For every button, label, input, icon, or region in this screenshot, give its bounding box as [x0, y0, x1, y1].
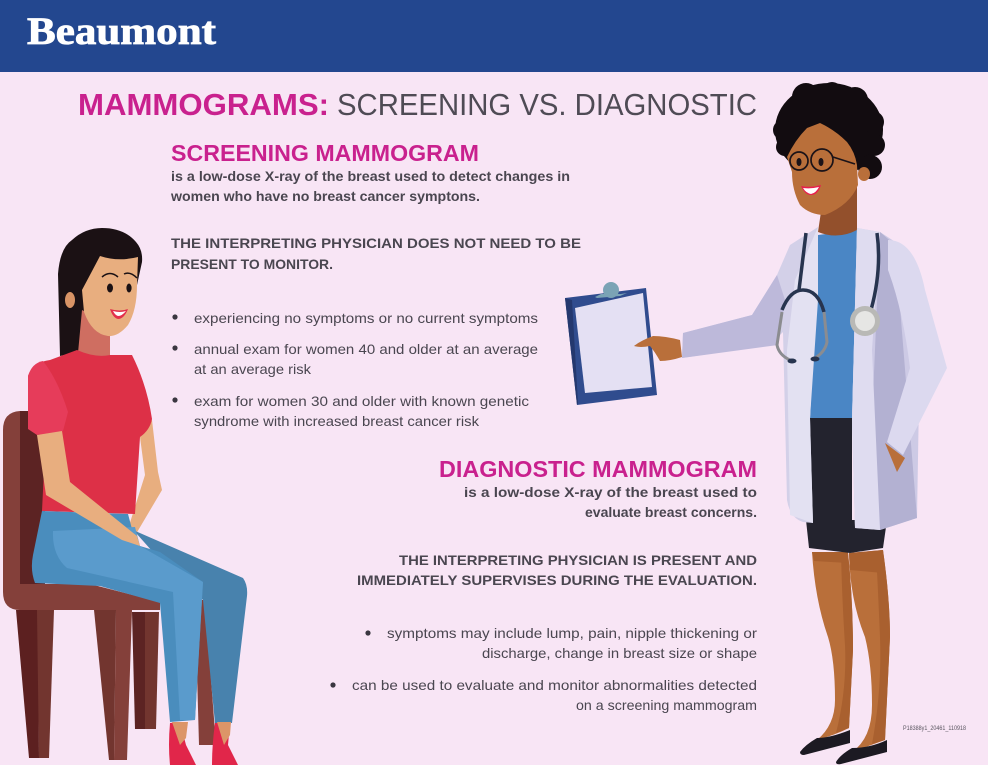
screening bullet list: at an average risk [194, 361, 312, 377]
screening bullet list: exam for women 30 and older with known genetic [194, 393, 529, 409]
hair [773, 82, 885, 179]
screening definition [170, 168, 570, 204]
coat [682, 227, 920, 530]
diagnostic supervision statement: IMMEDIATELY SUPERVISES DURING THE EVALUATION. [357, 572, 757, 588]
screening definition: is a low-dose X-ray of the breast used to detect changes in [171, 168, 570, 184]
screening bullet list: annual exam for women 40 and older at an average [194, 341, 538, 357]
chair [3, 411, 216, 760]
jeans back leg [120, 515, 247, 723]
screening bullet list: syndrome with increased breast cancer risk [194, 413, 480, 429]
diagnostic bullet list: symptoms may include lump, pain, nipple thickening or [387, 625, 757, 641]
skirt [806, 520, 887, 553]
ear [65, 292, 75, 308]
face [82, 256, 138, 336]
screening bullet list [172, 310, 538, 429]
illustration: seated patient on chair [3, 228, 247, 765]
panel: screening mammogram text [170, 140, 581, 429]
shirt [810, 230, 857, 420]
shirt sleeve [28, 361, 68, 435]
illustration: doctor with clipboard [565, 82, 947, 764]
skirt top [810, 418, 852, 526]
neck [78, 310, 110, 358]
legs [812, 550, 890, 752]
neck [818, 180, 857, 236]
shoes [169, 722, 238, 765]
jeans front leg [32, 511, 203, 722]
diagnostic definition: evaluate breast concerns. [585, 504, 757, 520]
heading: screening mammogram: SCREENING MAMMOGRAM [171, 140, 479, 166]
shirt [28, 350, 152, 514]
logo wordmark: Beaumont [27, 10, 216, 53]
shoes [800, 730, 887, 764]
arm behind [128, 420, 162, 534]
face [787, 123, 858, 215]
title [78, 87, 757, 122]
diagnostic supervision statement: THE INTERPRETING PHYSICIAN IS PRESENT AND [399, 552, 757, 568]
screening definition: women who have no breast cancer symptons. [170, 188, 480, 204]
heading: diagnostic mammogram: DIAGNOSTIC MAMMOGRAM [439, 456, 757, 482]
header band [0, 0, 988, 72]
coat sleeve [887, 240, 947, 455]
facial features [102, 273, 137, 319]
diagnostic bullet list: discharge, change in breast size or shape [482, 645, 757, 661]
glasses and features [790, 149, 855, 195]
panel: diagnostic mammogram text [330, 456, 757, 713]
diagnostic bullet list [330, 625, 757, 713]
diagnostic definition [464, 484, 757, 520]
hand in pocket [885, 443, 905, 472]
diagnostic supervision statement [357, 552, 757, 588]
stethoscope [777, 233, 880, 364]
screening supervision statement [171, 235, 581, 272]
screening supervision statement: THE INTERPRETING PHYSICIAN DOES NOT NEED TO BE [171, 235, 581, 251]
diagnostic definition: is a low-dose X-ray of the breast used to [464, 484, 757, 500]
diagnostic bullet list: can be used to evaluate and monitor abnormalities detected [352, 677, 757, 693]
diagnostic bullet list: on a screening mammogram [576, 697, 757, 713]
clipboard [565, 282, 657, 405]
arm front [37, 431, 140, 546]
title: SCREENING VS. DIAGNOSTIC [337, 87, 757, 122]
screening supervision statement: PRESENT TO MONITOR. [171, 256, 333, 272]
screening bullet list: experiencing no symptoms or no current symptoms [194, 310, 538, 326]
hand pointing [634, 336, 682, 361]
hair [58, 228, 142, 356]
title: MAMMOGRAMS: [78, 87, 329, 122]
print code: P18388y1_20461_110918 [903, 725, 966, 732]
ear [858, 167, 870, 181]
